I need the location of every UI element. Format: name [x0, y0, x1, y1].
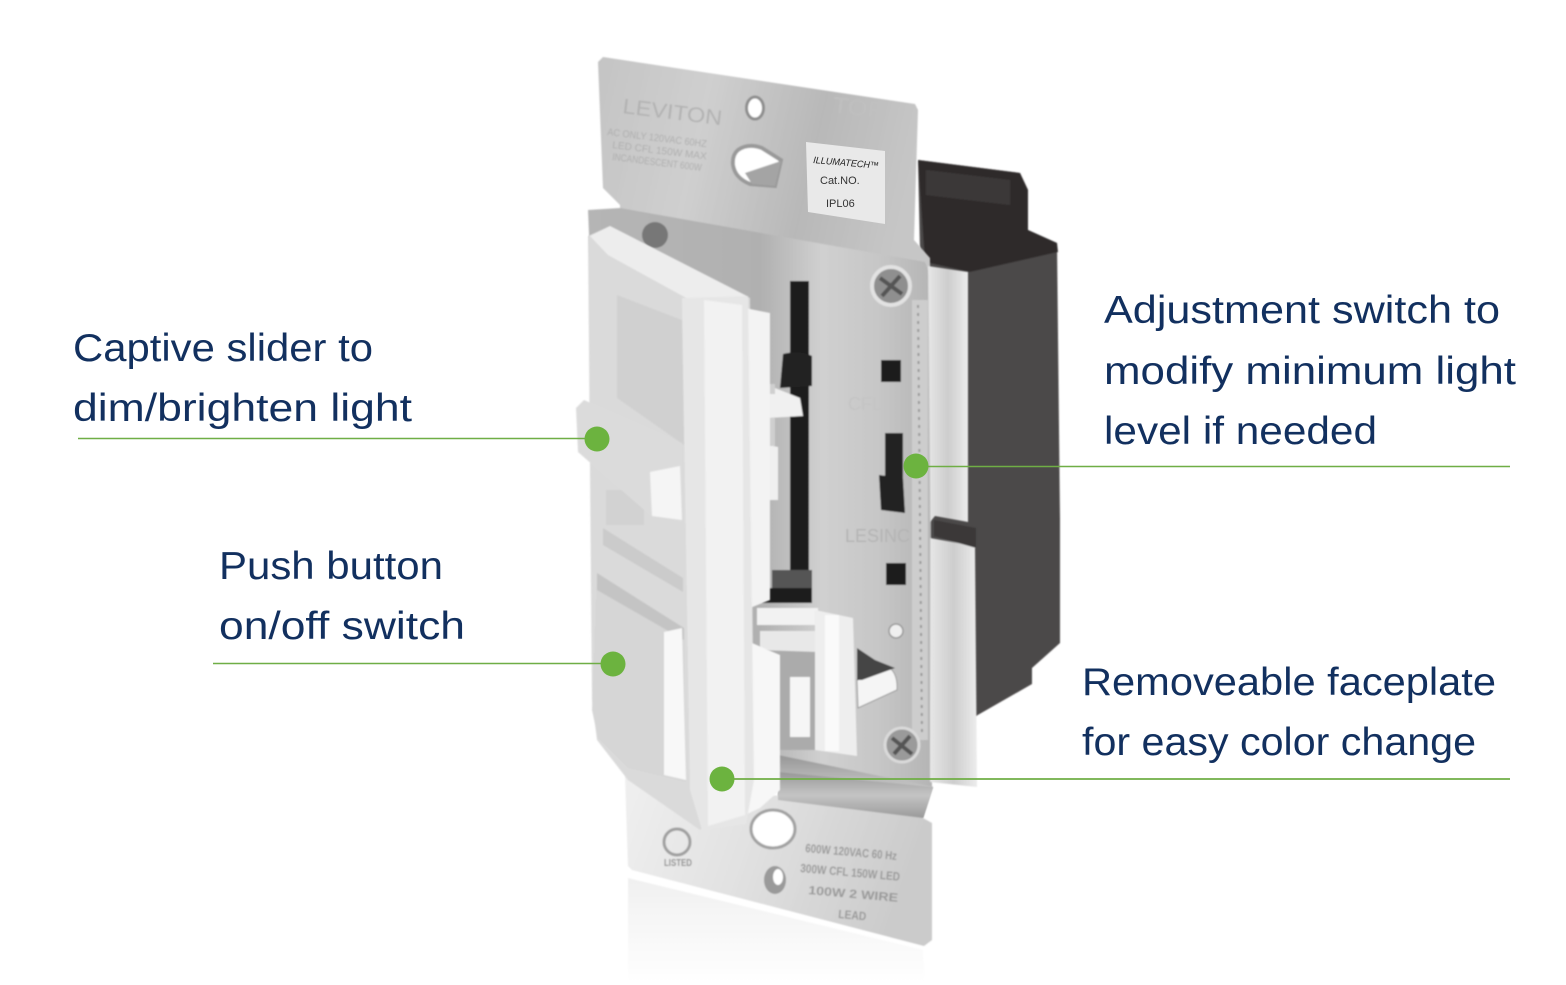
top frame highlight [590, 226, 747, 312]
square window lower [886, 563, 906, 585]
text: adjustment switch: level if needed [1104, 410, 1377, 453]
small screw [764, 866, 786, 894]
reflection under plate [628, 878, 925, 985]
faceplate white rail lower [745, 640, 780, 815]
UL mark [664, 829, 690, 855]
dimmer slot [790, 281, 809, 571]
screw partly hidden [642, 222, 668, 248]
right flange [928, 266, 977, 787]
text: captive slider: dim/brighten light [73, 387, 412, 430]
catalogue sticker: ILLUMATECH™ [813, 155, 879, 172]
serrated edge strip [912, 300, 928, 740]
stamped words: CFL [848, 394, 882, 414]
oval mount hole [751, 810, 795, 848]
rating text stamps: 100W 2 WIRE [808, 883, 899, 905]
lower bent shelf [778, 755, 933, 818]
actuator block [790, 677, 810, 737]
keyhole slot [733, 146, 781, 186]
ridge below slider [603, 528, 683, 592]
rivet [889, 624, 903, 638]
device photo illustration [576, 57, 1060, 985]
white faceplate [576, 226, 780, 830]
faceplate white rail upper [745, 308, 770, 610]
callout: captive slider [73, 327, 610, 452]
actuator vertical bar [815, 610, 857, 756]
adjustment slot [885, 433, 903, 508]
rating stamps: LED CFL 150W MAX [612, 140, 708, 163]
brand stamp: LEVITON [621, 95, 723, 130]
rating text stamps: 300W CFL 150W LED [800, 861, 901, 884]
rating stamps: INCANDESCENT 600W [612, 152, 703, 174]
slider ribs [606, 490, 644, 525]
text: removeable faceplate: for easy color change [1082, 721, 1476, 764]
callout: push button [213, 545, 626, 676]
lower mounting plate [625, 772, 933, 946]
white actuator pin [857, 668, 897, 708]
lower white actuator arms [757, 608, 818, 625]
lower mounting plate: LISTED [664, 858, 692, 869]
screw top [872, 267, 910, 305]
text: captive slider: Captive slider to [73, 327, 373, 370]
adjustment knob [879, 475, 905, 513]
rating stamps: AC ONLY 120VAC 60HZ [607, 127, 707, 150]
rating text stamps: LEAD [838, 907, 867, 923]
faceplate grey panel [588, 226, 754, 830]
text: adjustment switch: Adjustment switch to [1104, 289, 1500, 332]
callout: adjustment switch [904, 289, 1516, 478]
captive slider tab [576, 400, 682, 522]
top mark: TOP [831, 92, 886, 123]
lower actuator shadow [770, 650, 816, 750]
callout: removeable faceplate [710, 661, 1510, 792]
metal centre body [588, 208, 933, 818]
white pins on body [750, 380, 803, 500]
screw hole small [746, 97, 764, 119]
rating text stamps [800, 841, 901, 923]
catalogue sticker: Cat.NO. [820, 175, 860, 187]
text: push button: Push button [219, 545, 443, 588]
top mounting plate [598, 57, 930, 275]
catalogue sticker: IPL06 [826, 198, 855, 210]
dark pin shadow [857, 648, 895, 680]
text: push button: on/off switch [219, 605, 465, 648]
front strip [682, 296, 754, 830]
screw bottom [885, 728, 919, 762]
rating stamps [607, 127, 708, 174]
push button [592, 573, 686, 782]
text: removeable faceplate: Removeable faceplate [1082, 661, 1496, 704]
metal centre body: LESINC [845, 526, 910, 546]
slider track recess [617, 295, 684, 445]
dimmer slider knob [780, 352, 812, 388]
square window upper [881, 360, 901, 382]
catalogue sticker [806, 142, 885, 224]
black rear housing [918, 160, 1060, 716]
text: adjustment switch: modify minimum light [1104, 350, 1516, 393]
rating text stamps: 600W 120VAC 60 Hz [805, 841, 898, 863]
